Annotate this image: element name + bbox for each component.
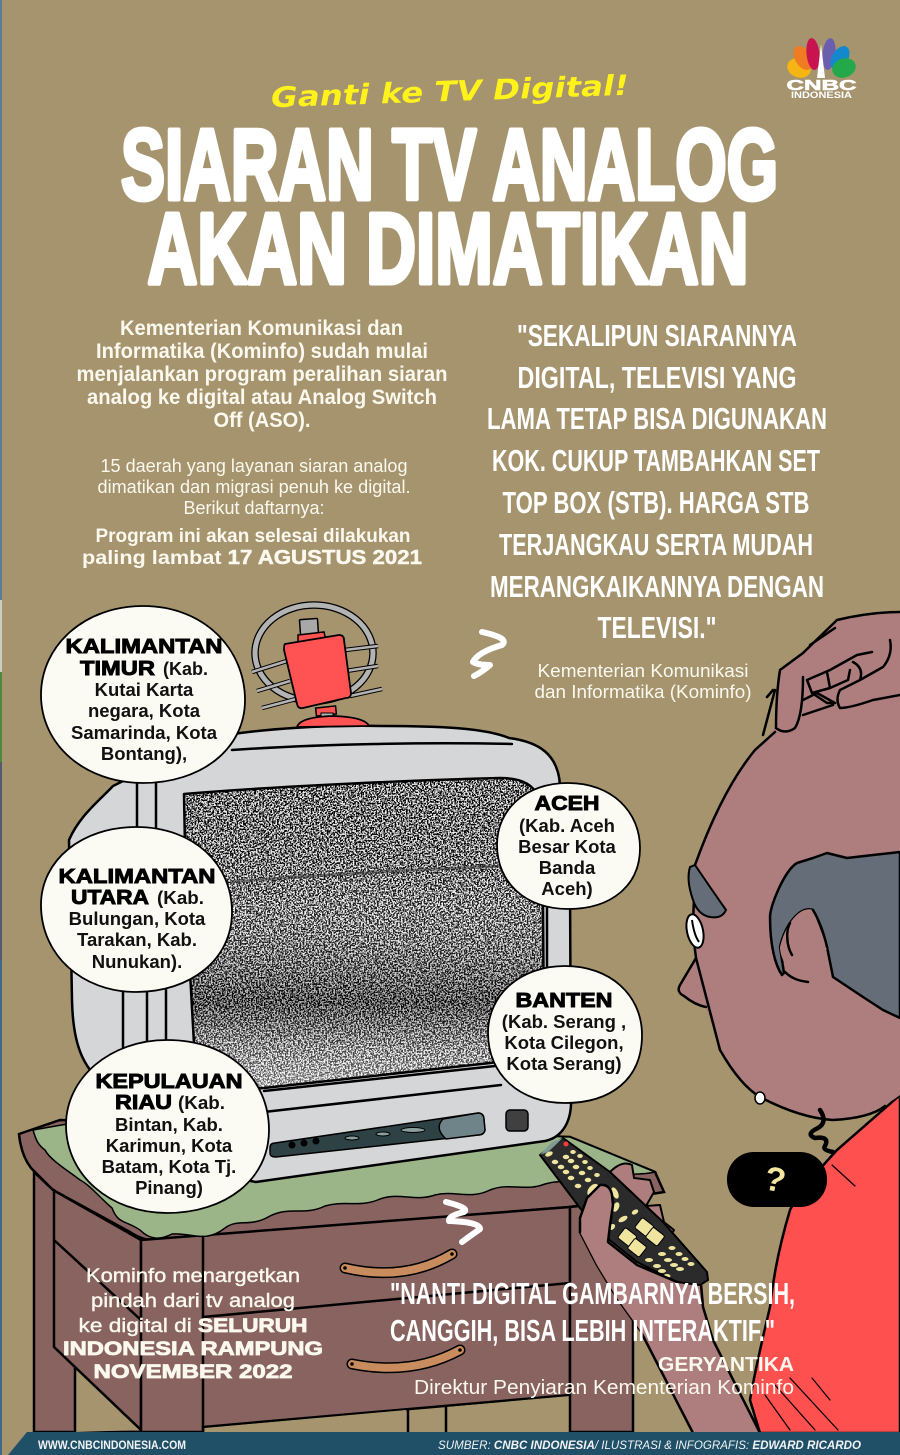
bubble: Kalimantan Utara: Tarakan, Kab. (77, 929, 197, 950)
fingers behind remote (610, 1164, 674, 1245)
power button (506, 1110, 528, 1131)
target text: ke digital di SELURUH (78, 1315, 308, 1337)
lower panel lines (264, 1066, 501, 1112)
region list intro (98, 455, 410, 518)
target text: INDONESIA RAMPUNG (63, 1338, 323, 1360)
drawer handle upper (343, 1252, 454, 1273)
footer bar: SUMBER: CNBC INDONESIA/ ILUSTRASI & INFOGRAFIS: EDWARD RICARDO (438, 1438, 862, 1452)
palm and thumb over remote (580, 1185, 660, 1330)
target text (63, 1265, 323, 1383)
bubble: Kepulauan Riau: Bintan, Kab. (115, 1114, 223, 1135)
person (580, 612, 900, 1433)
bubble: Banten: Kota Cilegon, (504, 1032, 624, 1053)
footer bar (8, 1432, 900, 1455)
bubble: Banten: Kota Serang) (506, 1053, 622, 1074)
eyebrow (689, 865, 726, 917)
subtitle: Ganti ke TV Digital! (271, 69, 629, 114)
CNBC Indonesia logo: INDONESIA (791, 90, 853, 100)
bubble: Aceh: Aceh) (541, 878, 593, 899)
head and hand shape (679, 612, 900, 1120)
bubble: Kalimantan Utara (41, 827, 232, 992)
bubble: Kepulauan Riau: RIAU (115, 1092, 172, 1114)
bubble: Kalimantan Utara: (Kab. (157, 887, 204, 908)
top quote: "SEKALIPUN SIARANNYA (517, 318, 797, 353)
bubble: Aceh (497, 783, 640, 909)
bubble: Kalimantan Utara: Nunukan). (92, 951, 182, 972)
bubble: Kalimantan Timur: negara, Kota (88, 700, 201, 721)
left edge colour strip (0, 0, 2, 1455)
tv top edge line (232, 743, 512, 750)
remote control (540, 1138, 708, 1330)
hand on head (763, 612, 900, 735)
bubble: Banten: BANTEN (516, 990, 612, 1012)
tv body (69, 726, 571, 1182)
head outline (679, 732, 885, 1120)
eye (684, 913, 706, 949)
front panel (141, 1207, 570, 1432)
target text: pindah dari tv analog (91, 1290, 295, 1312)
deadline text: paling lambat 17 AGUSTUS 2021 (82, 547, 422, 569)
bubble: Kepulauan Riau: Karimun, Kota (106, 1135, 233, 1156)
bubble: Kalimantan Timur (41, 606, 245, 783)
squiggle icon bottom (446, 1202, 480, 1242)
intro text: menjalankan program peralihan siaran (76, 363, 448, 386)
table cloth (33, 1120, 655, 1238)
antenna (252, 605, 382, 727)
question bubble (727, 1110, 833, 1207)
top quote (487, 318, 827, 645)
floor gaps under front panel (205, 1396, 570, 1432)
quote source (534, 661, 752, 702)
right leg (570, 1200, 633, 1432)
bubble: Banten: (Kab. Serang , (502, 1011, 626, 1032)
bubble: Kalimantan Timur: Kutai Karta (95, 679, 194, 700)
target text: Kominfo menargetkan (86, 1265, 300, 1287)
table top surface (19, 1120, 664, 1240)
region list intro: Berikut daftarnya: (184, 497, 324, 518)
bubble: Kalimantan Utara: Bulungan, Kota (69, 908, 206, 929)
arm (580, 1230, 760, 1433)
bubble: Kepulauan Riau (66, 1040, 269, 1213)
bubble: Aceh: (Kab. Aceh (519, 815, 615, 836)
bubble: Kalimantan Timur: TIMUR (80, 658, 156, 680)
CNBC Indonesia logo (784, 37, 859, 100)
top quote: DIGITAL, TELEVISI YANG (518, 360, 796, 395)
bubble: Kalimantan Timur: KALIMANTAN (66, 636, 222, 658)
side vents (123, 780, 547, 1050)
squiggle icon top (473, 632, 504, 676)
chin mark (755, 1092, 765, 1104)
quote attribution (414, 1354, 794, 1399)
television (69, 726, 571, 1182)
bubble: Kepulauan Riau: KEPULAUAN (96, 1071, 242, 1093)
deadline text (82, 525, 422, 569)
region list intro: 15 daerah yang layanan siaran analog (100, 455, 408, 476)
target text: NOVEMBER 2022 (94, 1361, 293, 1383)
bubble: Aceh: ACEH (534, 793, 600, 815)
bubble: Kepulauan Riau: Batam, Kota Tj. (102, 1156, 236, 1177)
bubble: Kepulauan Riau: Pinang) (135, 1177, 203, 1198)
bubble: Aceh: Banda (539, 857, 596, 878)
hair (770, 852, 900, 1018)
intro text: Off (ASO). (214, 409, 310, 432)
intro text (76, 317, 448, 432)
footer bar: WWW.CNBCINDONESIA.COM (38, 1440, 186, 1452)
quote source: Kementerian Komunikasi (538, 661, 748, 681)
table (19, 1120, 664, 1432)
screen noise (180, 775, 550, 1091)
bubble: Kalimantan Timur: (Kab. (163, 658, 208, 679)
bubble: Kalimantan Timur: Samarinda, Kota (71, 722, 218, 743)
deadline text: Program ini akan selesai dilakukan (96, 525, 410, 547)
control strip (270, 1113, 485, 1157)
bubble: Banten (488, 966, 642, 1103)
drawer handle lower (350, 1348, 462, 1368)
title (121, 109, 778, 305)
ear (780, 909, 827, 982)
question bubble: ? (761, 1159, 789, 1201)
region list intro: dimatikan dan migrasi penuh ke digital. (98, 476, 410, 497)
bubble: Kalimantan Utara: UTARA (71, 887, 149, 909)
intro text: Kementerian Komunikasi dan (120, 317, 403, 340)
bubble: Kalimantan Timur: Bontang), (101, 743, 187, 764)
quote source: dan Informatika (Kominfo) (534, 682, 752, 702)
bubble: Kepulauan Riau: (Kab. (178, 1092, 225, 1113)
left leg and side panel (34, 1172, 141, 1432)
intro text: analog ke digital atau Analog Switch (87, 386, 437, 409)
floor gap under side panel (54, 1347, 141, 1432)
top quote: TELEVISI." (598, 610, 716, 645)
intro text: Informatika (Kominfo) sudah mulai (96, 340, 428, 363)
bottom quote (390, 1276, 795, 1348)
bubble: Kalimantan Utara: KALIMANTAN (58, 866, 216, 888)
shirt (750, 1095, 900, 1433)
quote attribution: GERYANTIKA (658, 1354, 794, 1376)
bubble: Aceh: Besar Kota (518, 836, 617, 857)
quote attribution: Direktur Penyiaran Kementerian Kominfo (414, 1377, 794, 1399)
CNBC Indonesia logo: CNBC (786, 77, 857, 94)
